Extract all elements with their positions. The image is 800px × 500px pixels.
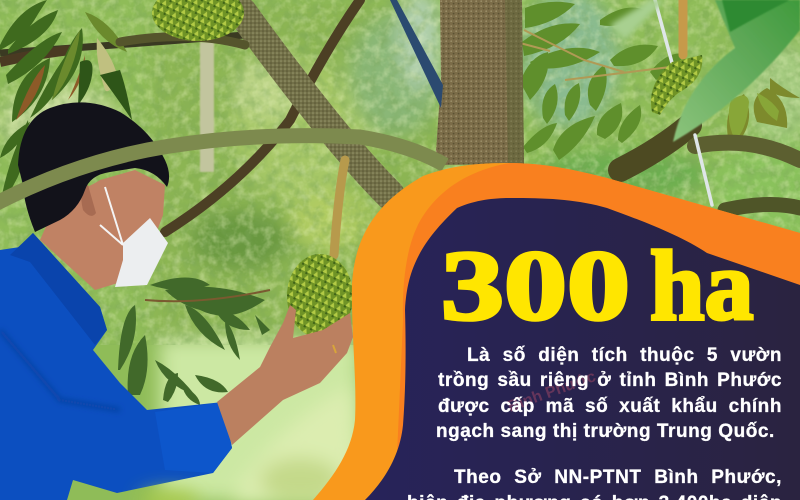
blurred foreground leaf xyxy=(140,385,360,500)
navy panel xyxy=(365,198,800,500)
durians xyxy=(152,0,702,115)
body text: Là số diện tích thuộc 5 vườn xyxy=(467,345,782,366)
left top leaves xyxy=(0,0,245,205)
shirt xyxy=(0,233,232,500)
watermark: Bình Phước xyxy=(506,368,598,416)
headline xyxy=(441,230,754,341)
mask xyxy=(115,218,168,287)
hand and forearm xyxy=(217,305,353,445)
big green leaf top right xyxy=(673,0,800,142)
man xyxy=(0,102,232,500)
hanging leaves beside man xyxy=(118,278,270,405)
body text: Theo Sở NN-PTNT Bình Phước, xyxy=(454,467,782,488)
body text: ngạch sang thị trường Trung Quốc. xyxy=(436,421,775,442)
arched branch xyxy=(0,136,445,204)
headline: 300 xyxy=(441,230,630,341)
right-side leaves xyxy=(520,2,800,160)
body text: trồng sầu riêng ở tỉnh Bình Phước xyxy=(438,370,782,391)
light orange layer xyxy=(313,163,800,500)
durian in hand xyxy=(287,254,353,338)
neck and face xyxy=(40,170,165,290)
hair xyxy=(18,102,169,232)
body text: được cấp mã số xuất khẩu chính xyxy=(438,396,782,417)
mid orange layer xyxy=(395,163,800,500)
headline: ha xyxy=(650,231,754,341)
trunk xyxy=(435,0,524,165)
branches xyxy=(120,0,800,255)
blue tool handle xyxy=(390,0,443,108)
